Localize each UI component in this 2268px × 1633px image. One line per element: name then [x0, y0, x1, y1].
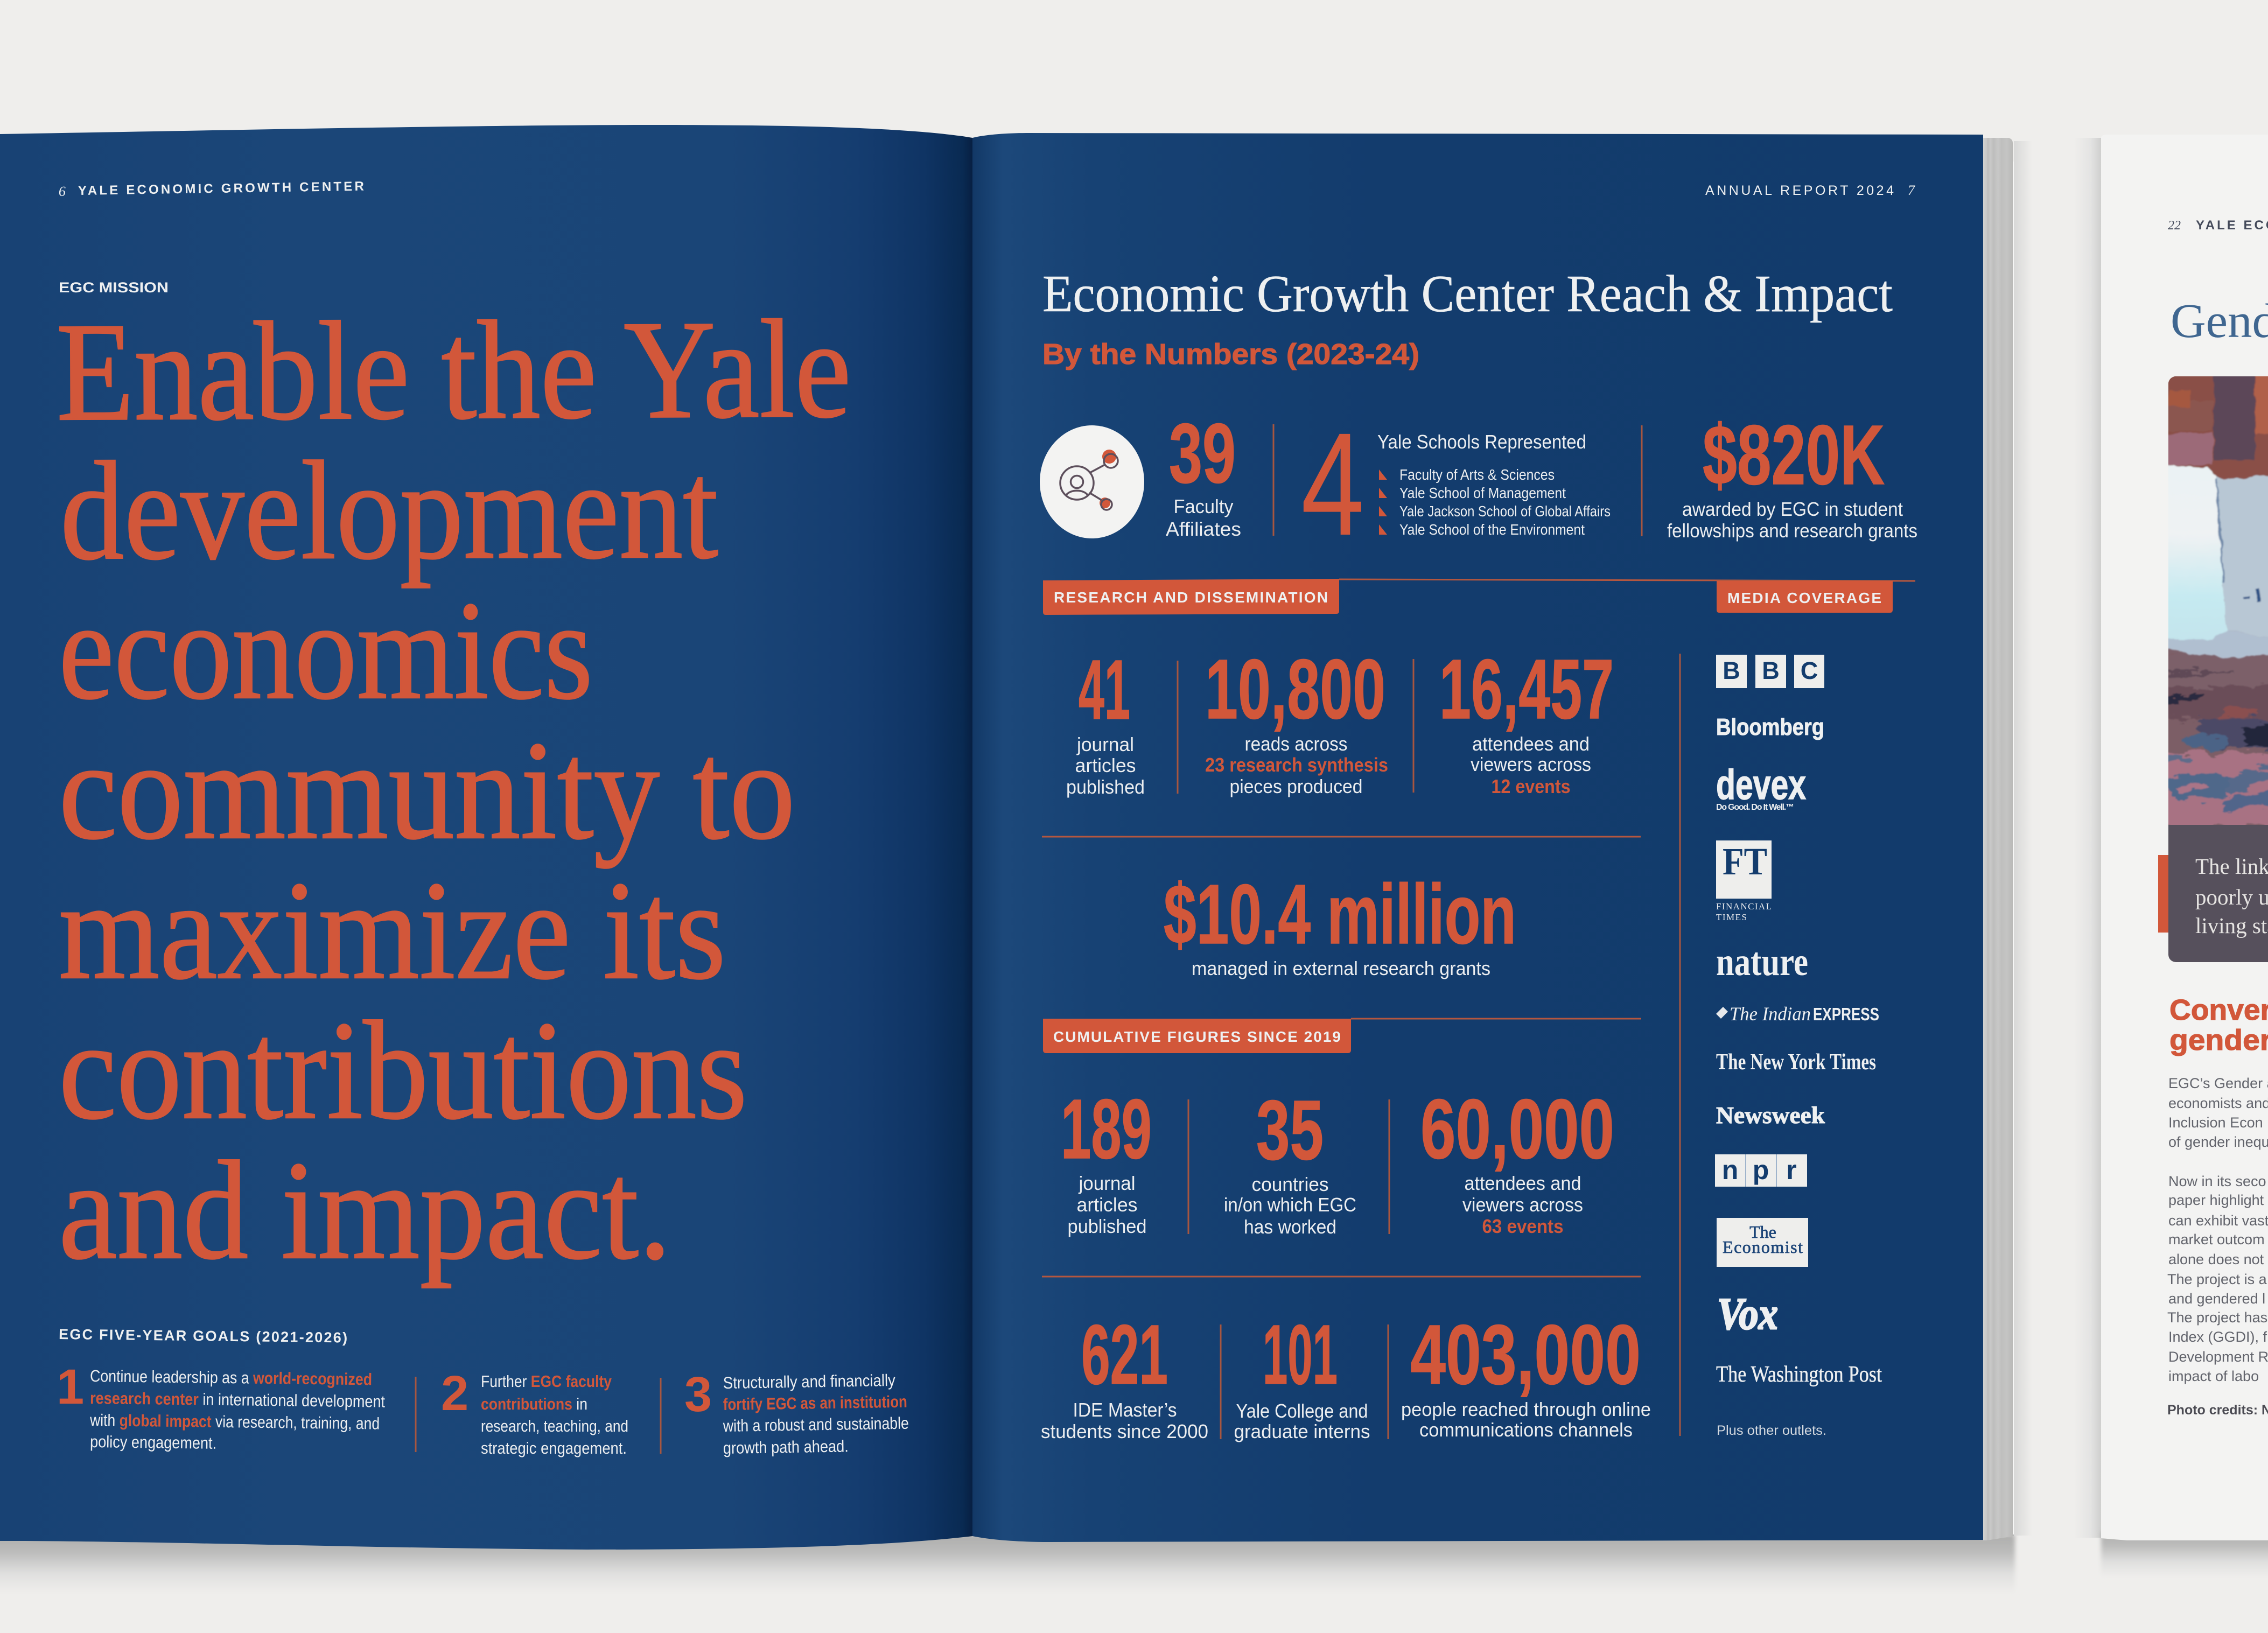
body text: economists and	[2168, 1095, 2268, 1111]
stat: 60,000 attendees: 60,000	[1420, 1082, 1614, 1176]
panel: adjacent report page	[2101, 135, 2268, 1540]
running header: left: 6	[59, 184, 66, 199]
goal 3: with a robust and sustainable	[723, 1414, 909, 1435]
banner: cumulative figures	[1043, 1019, 1351, 1053]
stat: 39 faculty affiliates: 39	[1169, 407, 1236, 501]
stat: 4 Yale schools: Yale Jackson School of Global Affairs	[1399, 503, 1611, 520]
logo: Indian Express: The Indian	[1730, 1003, 1811, 1025]
stat: 35 countries: has worked	[1244, 1216, 1336, 1238]
body text: The project has	[2167, 1309, 2267, 1326]
stat: 39 faculty affiliates: Faculty	[1174, 495, 1233, 517]
banner: media coverage: MEDIA COVERAGE	[1727, 590, 1881, 606]
logo: devex: Do Good. Do It Well.™	[1716, 803, 1794, 812]
logo: Indian Express	[1716, 1003, 1879, 1025]
body text	[2167, 1075, 2268, 1384]
goal 1	[57, 1359, 386, 1453]
note: other outlets: Plus other outlets.	[1717, 1423, 1826, 1438]
stat: 189 journal articles: articles	[1077, 1194, 1137, 1216]
stat: 16,457 attendees: attendees and	[1472, 733, 1590, 755]
title: Economic Growth Center Reach & Impact	[1042, 265, 1893, 323]
mission headline: economics	[59, 572, 593, 728]
logo: BBC	[1716, 655, 1824, 688]
icon: faculty network	[1040, 425, 1144, 538]
running header: left: YALE ECONOMIC GROWTH CENTER	[78, 179, 364, 198]
stat: 41 journal articles: 41	[1079, 643, 1130, 737]
logo: Newsweek: Newsweek	[1716, 1102, 1825, 1129]
stat: 189 journal articles: journal	[1079, 1172, 1135, 1194]
stat: 35 countries: in/on which EGC	[1224, 1194, 1356, 1216]
stat: 189 journal articles: published	[1067, 1215, 1147, 1237]
photo caption	[2168, 825, 2268, 962]
panel: right page	[972, 133, 1983, 1542]
logo: The Economist: The	[1749, 1222, 1776, 1242]
logo: devex: devex	[1716, 761, 1806, 808]
stat: 10,800 reads: 23 research synthesis	[1205, 754, 1388, 776]
body text: alone does not	[2168, 1251, 2264, 1267]
heading: convening on gender	[2169, 994, 2268, 1056]
mission headline: development	[60, 432, 719, 589]
stat: 10,800 reads: 10,800	[1205, 642, 1385, 737]
mission headline: contributions	[59, 992, 747, 1148]
stat: 35 countries: countries	[1251, 1173, 1329, 1195]
heading: five-year goals: EGC FIVE-YEAR GOALS (2021-2026)	[59, 1326, 347, 1346]
stat: 10,800 reads: reads across	[1245, 733, 1347, 755]
logo: NPR	[1715, 1154, 1807, 1187]
logo: Financial Times: FT	[1723, 840, 1767, 883]
stat: 101 interns: 101	[1263, 1308, 1338, 1402]
logo: New York Times: The New York Times	[1716, 1050, 1876, 1075]
goal 1: 1	[57, 1359, 84, 1414]
goal 2: Further EGC faculty	[481, 1372, 612, 1391]
stat: 60,000 attendees: 63 events	[1482, 1215, 1564, 1237]
banner: cumulative figures: CUMULATIVE FIGURES SINCE 2019	[1053, 1028, 1341, 1045]
stat: 4 Yale schools	[1301, 402, 1611, 566]
banner: research and dissemination: RESEARCH AND DISSEMINATION	[1054, 589, 1328, 606]
running header: right: 7	[1908, 183, 1915, 198]
logo: Financial Times: TIMES	[1716, 912, 1747, 922]
goal 2: 2	[441, 1366, 468, 1421]
logo: Bloomberg: Bloomberg	[1716, 714, 1824, 740]
stat: 403,000 people: people reached through online	[1401, 1398, 1651, 1420]
goal 3: growth path ahead.	[723, 1436, 849, 1457]
logo: BBC: B	[1762, 657, 1780, 684]
stat: 189 journal articles	[1061, 1082, 1152, 1237]
stat: 35 countries	[1224, 1083, 1356, 1238]
stat: 60,000 attendees: attendees and	[1465, 1172, 1581, 1194]
body text: and gendered l	[2168, 1291, 2265, 1307]
stat: 403,000 people: 403,000	[1410, 1308, 1641, 1402]
body text: paper highlight	[2168, 1192, 2264, 1208]
body text: impact of labo	[2168, 1368, 2259, 1384]
goal 1: research center in international development	[90, 1389, 386, 1411]
stat: 189 journal articles: 189	[1061, 1082, 1152, 1176]
panel: left page	[0, 125, 972, 1550]
logo: Washington Post: The Washington Post	[1716, 1362, 1882, 1387]
mission headline: maximize its	[59, 852, 726, 1008]
heading: convening on gender: Conver	[2169, 994, 2268, 1026]
logo: BBC: B	[1723, 657, 1740, 684]
stat: 4 Yale schools: Yale Schools Represented	[1377, 431, 1586, 453]
page block edge	[1983, 138, 2014, 1540]
stat: $10.4 million: managed in external research grants	[1192, 957, 1490, 979]
goal 3: fortify EGC as an institution	[723, 1392, 907, 1414]
stat: 403,000 people	[1401, 1308, 1651, 1441]
goal 2	[441, 1366, 628, 1457]
running header: right: ANNUAL REPORT 2024	[1705, 183, 1894, 198]
logo: NPR: n	[1722, 1155, 1738, 1185]
logo: BBC: C	[1801, 657, 1818, 684]
body text: Now in its seco	[2168, 1173, 2266, 1189]
stat: 60,000 attendees	[1420, 1082, 1614, 1237]
mission headline: Enable the Yale	[56, 291, 851, 450]
stat: 39 faculty affiliates: Affiliates	[1166, 518, 1241, 540]
stat: 4 Yale schools: Yale School of Management	[1399, 485, 1566, 501]
stat: 41 journal articles: published	[1066, 776, 1145, 798]
stat: 403,000 people: communications channels	[1419, 1419, 1633, 1441]
goal 2: research, teaching, and	[481, 1417, 628, 1435]
logo: Financial Times	[1716, 840, 1772, 922]
logo: The Economist	[1717, 1218, 1808, 1267]
logo: The Economist: Economist	[1723, 1237, 1803, 1257]
stat: $820K: fellowships and research grants	[1667, 520, 1917, 542]
stat: 4 Yale schools: Faculty of Arts & Sciences	[1399, 466, 1555, 483]
stat: 60,000 attendees: viewers across	[1462, 1194, 1583, 1216]
body text: Index (GGDI), f	[2168, 1329, 2267, 1345]
goal 2: contributions in	[481, 1394, 587, 1413]
goal 3: 3	[684, 1367, 712, 1422]
logo: NPR: r	[1786, 1155, 1797, 1185]
accent tab	[2158, 855, 2168, 933]
stat: $820K	[1667, 408, 1917, 542]
stat: 41 journal articles	[1066, 643, 1145, 798]
stat: 621 students: students since 2000	[1041, 1420, 1208, 1442]
stat: 41 journal articles: articles	[1075, 754, 1136, 776]
running header: page 22: 22	[2168, 219, 2181, 233]
heading: convening on gender: gender	[2169, 1024, 2268, 1056]
goal 2: strategic engagement.	[481, 1439, 627, 1457]
stat: 16,457 attendees	[1439, 642, 1614, 797]
stat: 39 faculty affiliates	[1166, 407, 1241, 540]
logo: NPR: p	[1753, 1155, 1769, 1185]
stat: 41 journal articles: journal	[1076, 733, 1134, 755]
label: EGC mission: EGC MISSION	[59, 279, 169, 296]
stat: 621 students: IDE Master’s	[1073, 1399, 1177, 1421]
body text: of gender inequ	[2168, 1134, 2268, 1150]
stat: 101 interns	[1234, 1308, 1370, 1442]
stat: 4 Yale schools: Yale School of the Environment	[1399, 521, 1585, 538]
body text: market outcom	[2168, 1231, 2265, 1247]
stat: 10,800 reads: pieces produced	[1230, 775, 1362, 797]
stat: $820K: $820K	[1703, 408, 1885, 502]
stat: $820K: awarded by EGC in student	[1682, 498, 1903, 520]
banner: research and dissemination	[1043, 579, 1339, 615]
stat: 4 Yale schools: 4	[1301, 402, 1364, 566]
body text: Development R	[2168, 1349, 2268, 1365]
logo: Vox: Vox	[1717, 1289, 1778, 1339]
goal 3	[684, 1367, 909, 1457]
stat: 101 interns: Yale College and	[1236, 1400, 1368, 1422]
body text: The project is a	[2167, 1271, 2267, 1287]
photo	[2168, 376, 2268, 962]
stat: 16,457 attendees: 12 events	[1492, 775, 1570, 797]
stat: $10.4 million: $10.4 million	[1164, 867, 1516, 962]
mission headline: and impact.	[59, 1132, 671, 1288]
logo: Financial Times: FINANCIAL	[1716, 901, 1772, 912]
stat: 35 countries: 35	[1256, 1083, 1324, 1178]
logo: nature: nature	[1716, 940, 1808, 984]
stat: 101 interns: graduate interns	[1234, 1420, 1370, 1442]
stat: 16,457 attendees: viewers across	[1471, 753, 1591, 775]
goal 1: with global impact via research, training, and	[89, 1411, 380, 1433]
body text: can exhibit vast	[2168, 1213, 2268, 1229]
goal 1: Continue leadership as a world-recognized	[90, 1366, 372, 1389]
stat: 16,457 attendees: 16,457	[1439, 642, 1614, 737]
banner: media coverage	[1717, 581, 1893, 613]
subtitle: By the Numbers (2023-24)	[1042, 338, 1419, 370]
logo: Indian Express: EXPRESS	[1813, 1004, 1879, 1024]
stat: 621 students	[1041, 1308, 1208, 1442]
mission headline: community to	[59, 712, 795, 868]
goal 1: policy engagement.	[90, 1432, 216, 1453]
stat: 10,800 reads	[1205, 642, 1388, 797]
stat: 621 students: 621	[1081, 1308, 1168, 1402]
body text: Inclusion Econ	[2168, 1115, 2263, 1131]
mission headline	[56, 291, 851, 1288]
stat: $10.4 million	[1164, 867, 1516, 979]
goal 3: Structurally and financially	[723, 1371, 896, 1392]
